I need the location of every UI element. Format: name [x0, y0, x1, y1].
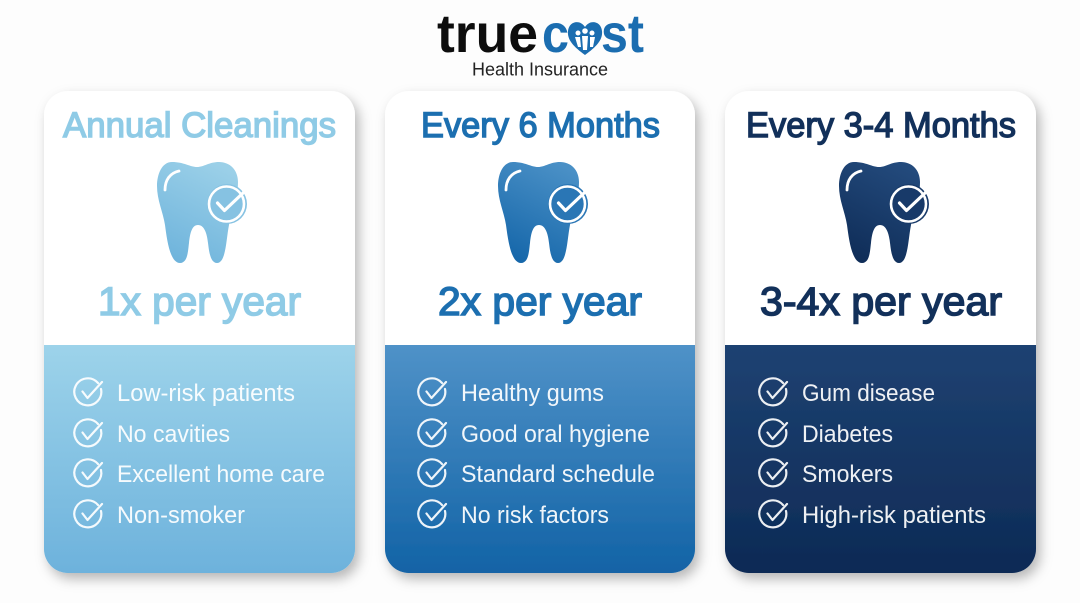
- list item: High-risk patients: [802, 502, 986, 529]
- list item: Gum disease: [802, 380, 935, 407]
- checklist: [759, 378, 986, 529]
- logo tagline: Health Insurance: [472, 60, 608, 80]
- panel: every 6 months: [385, 91, 695, 573]
- check icon: [74, 419, 102, 446]
- list item: Smokers: [802, 461, 893, 488]
- icon: tooth with check: [157, 162, 247, 263]
- check icon: [418, 459, 446, 486]
- heading: Every 6 Months: [421, 106, 660, 145]
- check icon: [759, 378, 787, 405]
- card background: [385, 91, 695, 573]
- checklist: [418, 378, 655, 529]
- frequency: 2x per year: [438, 280, 642, 324]
- list item: Diabetes: [802, 421, 893, 448]
- list item: Low-risk patients: [117, 380, 295, 407]
- logo wordmark: c: c: [542, 4, 569, 64]
- panel: every 3-4 months: [725, 91, 1036, 573]
- logo heart with family icon: [568, 22, 602, 55]
- card background: [44, 91, 355, 573]
- list item: Standard schedule: [461, 461, 655, 488]
- check icon: [418, 378, 446, 405]
- card background: [725, 91, 1036, 573]
- list item: Excellent home care: [117, 461, 325, 488]
- check icon: [759, 419, 787, 446]
- list item: Good oral hygiene: [461, 421, 650, 448]
- logo wordmark: st: st: [601, 4, 644, 64]
- frequency: 3-4x per year: [760, 280, 1002, 324]
- heading: Every 3-4 Months: [746, 106, 1016, 145]
- list item: Healthy gums: [461, 380, 604, 407]
- list item: Non-smoker: [117, 502, 245, 529]
- icon: tooth with check: [498, 162, 588, 263]
- list item: No cavities: [117, 421, 230, 448]
- check icon: [418, 500, 446, 527]
- check icon: [74, 378, 102, 405]
- check icon: [74, 459, 102, 486]
- panel: annual cleanings: [44, 91, 355, 573]
- checklist: [74, 378, 325, 529]
- icon: tooth with check: [839, 162, 929, 263]
- check icon: [418, 419, 446, 446]
- check icon: [759, 459, 787, 486]
- logo: truecost Health Insurance: [437, 4, 644, 80]
- heading: Annual Cleanings: [63, 106, 336, 145]
- check icon: [759, 500, 787, 527]
- logo wordmark: true: true: [437, 4, 538, 64]
- list item: No risk factors: [461, 502, 609, 529]
- frequency: 1x per year: [98, 280, 301, 324]
- check icon: [74, 500, 102, 527]
